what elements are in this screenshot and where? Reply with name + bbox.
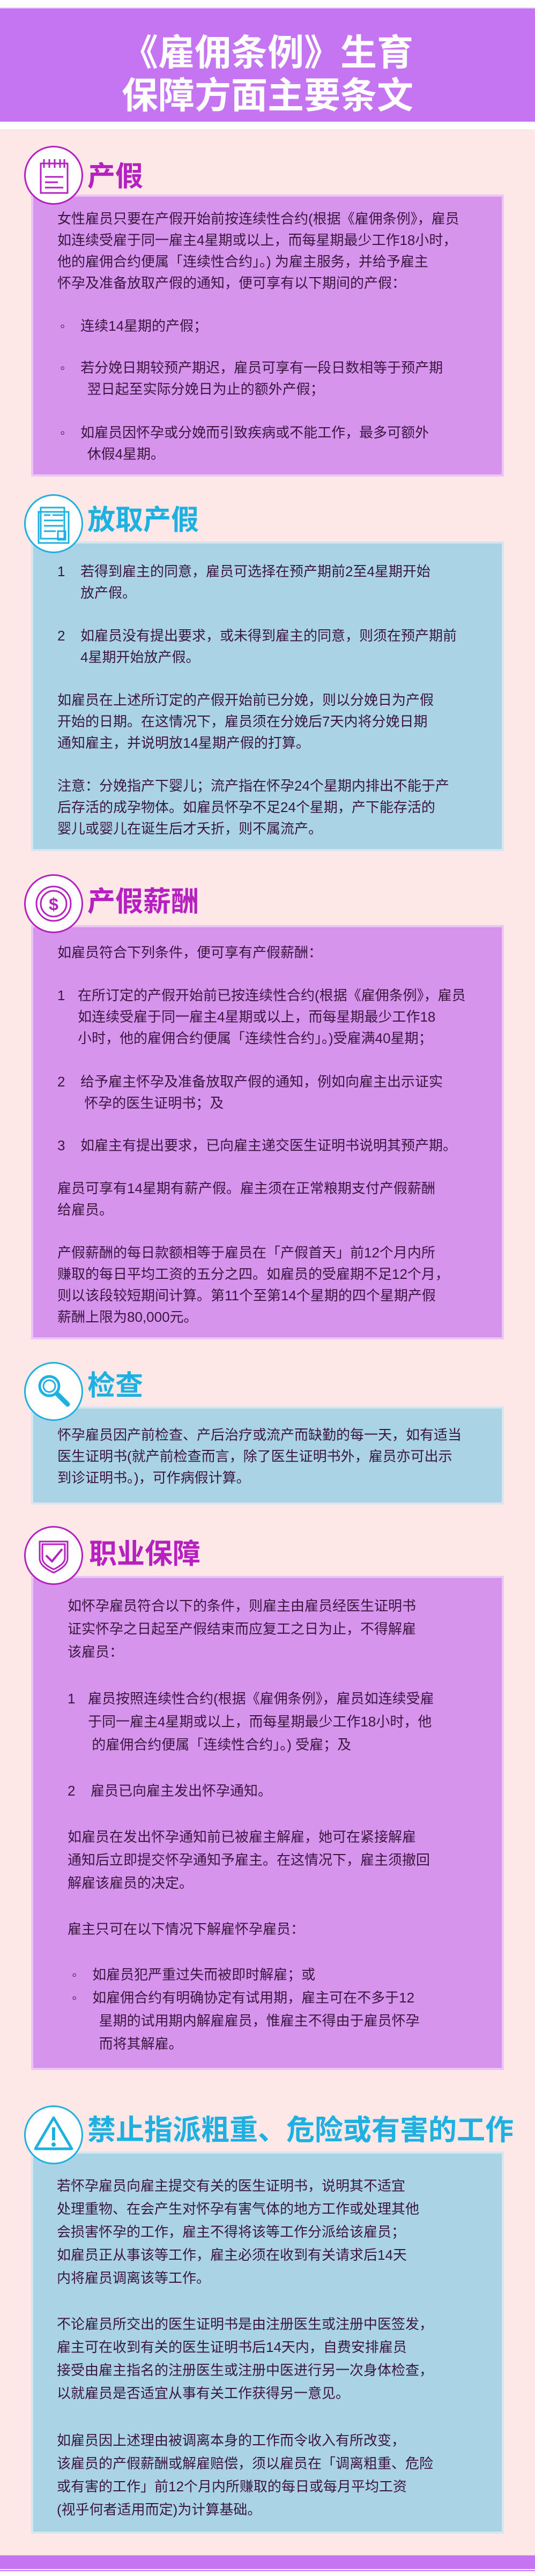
text: 3 <box>57 1137 65 1153</box>
text: 2 <box>57 628 65 644</box>
panel: hazardous work <box>31 2151 504 2534</box>
text: maternity leave intro: 女性雇员只要在产假开始前按连续性合约(根据《雇佣条例》，雇员 <box>57 211 459 227</box>
text: checkups <box>57 1427 462 1486</box>
text: 雇员已向雇主发出怀孕通知。 <box>91 1783 272 1799</box>
text: 以就雇员是否适宜从事有关工作获得另一意见。 <box>57 2385 350 2401</box>
bullet list: 翌日起至实际分娩日为止的额外产假； <box>87 381 324 397</box>
note: 注意：分娩指产下婴儿；流产指在怀孕24个星期内排出不能于产 <box>57 778 449 794</box>
text: 2 <box>68 1783 75 1799</box>
icon: dollar coin: $ <box>49 895 58 914</box>
text: 2 <box>57 1074 65 1090</box>
text: hazardous work: 若怀孕雇员向雇主提交有关的医生证明书，说明其不适宜 <box>57 2178 405 2194</box>
icon: shield check <box>24 1526 83 1585</box>
text: checkups: 医生证明书(就产前检查而言，除了医生证明书外，雇员亦可出示 <box>57 1448 452 1464</box>
text: maternity leave intro: 如连续受雇于同一雇主4星期或以上，而每星期最少工作18小时， <box>57 232 457 248</box>
heading: 禁止指派粗重、危险或有害的工作: 禁止指派粗重、危险或有害的工作 <box>87 2115 514 2146</box>
panel: taking leave <box>31 541 504 851</box>
text: hazardous work: 如雇员正从事该等工作，雇主必须在收到有关请求后14天 <box>57 2247 407 2263</box>
text: hazardous work: 内将雇员调离该等工作。 <box>57 2270 210 2286</box>
text: 雇主只可在以下情况下解雇怀孕雇员： <box>68 1921 304 1937</box>
text: employment protection: 证实怀孕之日起至产假结束而应复工之日为止，不得解雇 <box>68 1621 416 1637</box>
text: employment protection: 该雇员： <box>68 1644 123 1660</box>
title band <box>0 8 535 122</box>
bullet list: 休假4星期。 <box>87 446 165 462</box>
note <box>57 778 449 837</box>
heading: 产假薪酬: 产假薪酬 <box>87 887 199 918</box>
bullet list: ◦ 连续14星期的产假； <box>60 318 207 334</box>
bullet list <box>60 318 443 462</box>
heading: 放取产假: 放取产假 <box>87 505 199 536</box>
text: 在所订定的产假开始前已按连续性合约(根据《雇佣条例》，雇员 <box>78 987 466 1003</box>
footer band <box>0 2555 535 2569</box>
text: 4星期开始放产假。 <box>80 649 199 665</box>
text: checkups: 到诊证明书。)，可作病假计算。 <box>57 1470 250 1486</box>
text: hazardous work <box>57 2178 419 2286</box>
panel: maternity pay <box>31 925 504 1339</box>
title <box>122 33 413 116</box>
text: 如雇员没有提出要求，或未得到雇主的同意，则须在预产期前 <box>80 628 457 644</box>
text: 解雇该雇员的决定。 <box>68 1875 193 1891</box>
text: hazardous work: 处理重物、在会产生对怀孕有害气体的地方工作或处理其他 <box>57 2201 419 2217</box>
text: 该雇员的产假薪酬或解雇赔偿，须以雇员在「调离粗重、危险 <box>57 2455 433 2471</box>
text: maternity pay: 如雇员符合下列条件，便可享有产假薪酬： <box>57 944 322 961</box>
text: checkups: 怀孕雇员因产前检查、产后治疗或流产而缺勤的每一天，如有适当 <box>57 1427 462 1443</box>
title: 保障方面主要条文 <box>122 76 413 116</box>
text: taking leave items: 1 <box>57 563 65 579</box>
text: 雇员可享有14星期有薪产假。雇主须在正常粮期支付产假薪酬 <box>57 1180 435 1196</box>
text: 如雇员在上述所订定的产假开始前已分娩，则以分娩日为产假 <box>57 692 434 708</box>
text: taking leave items <box>57 563 430 601</box>
panel: employment protection <box>31 1576 504 2070</box>
text: maternity leave intro <box>57 211 459 291</box>
text: 雇员按照连续性合约(根据《雇佣条例》，雇员如连续受雇 <box>88 1691 434 1707</box>
panel: checkups <box>31 1406 504 1505</box>
text: 于同一雇主4星期或以上，而每星期最少工作18小时，他 <box>88 1714 432 1730</box>
note: 婴儿或婴儿在诞生后才夭折，则不属流产。 <box>57 821 322 837</box>
text: 给雇员。 <box>57 1202 113 1218</box>
text: 通知后立即提交怀孕通知予雇主。在这情况下，雇主须撤回 <box>68 1852 430 1868</box>
text: 如雇员因上述理由被调离本身的工作而令收入有所改变， <box>57 2432 405 2448</box>
title: 《雇佣条例》生育 <box>122 33 413 73</box>
text: 星期的试用期内解雇雇员，惟雇主不得由于雇员怀孕 <box>99 2013 420 2029</box>
text: 赚取的每日平均工资的五分之四。如雇员的受雇期不足12个月， <box>57 1266 449 1282</box>
text: 1 <box>57 987 65 1003</box>
note: 后存活的成孕物体。如雇员怀孕不足24个星期，产下能存活的 <box>57 799 435 815</box>
text: taking leave items: 若得到雇主的同意，雇员可选择在预产期前2至4星期开始 <box>80 563 430 579</box>
icon: magnifier <box>24 1362 83 1421</box>
text: ◦ 如雇佣合约有明确协定有试用期，雇主可在不多于12 <box>72 1990 414 2006</box>
text: 产假薪酬的每日款额相等于雇员在「产假首天」前12个月内所 <box>57 1245 435 1261</box>
text: ◦ 如雇员犯严重过失而被即时解雇；或 <box>72 1967 315 1983</box>
text: (视乎何者适用而定)为计算基础。 <box>57 2501 261 2518</box>
text: 不论雇员所交出的医生证明书是由注册医生或注册中医签发， <box>57 2316 433 2332</box>
text: employment protection <box>68 1598 416 1660</box>
text: 如连续受雇于同一雇主4星期或以上，而每星期最少工作18 <box>78 1009 435 1025</box>
text: maternity leave intro: 怀孕及准备放取产假的通知，便可享有以下期间的产假： <box>57 275 406 291</box>
text: employment protection: 如怀孕雇员符合以下的条件，则雇主由雇员经医生证明书 <box>68 1598 416 1614</box>
text: hazardous work: 会损害怀孕的工作，雇主不得将该等工作分派给该雇员； <box>57 2224 405 2240</box>
text: 则以该段较短期间计算。第11个至第14个星期的四个星期产假 <box>57 1287 436 1304</box>
icon: notepad <box>24 146 83 205</box>
text: 薪酬上限为80,000元。 <box>57 1309 198 1325</box>
text: 或有害的工作」前12个月内所赚取的每日或每月平均工资 <box>57 2478 407 2495</box>
text: 如雇主有提出要求，已向雇主递交医生证明书说明其预产期。 <box>80 1137 457 1153</box>
text: 怀孕的医生证明书；及 <box>84 1095 224 1111</box>
icon: document <box>24 494 83 553</box>
text: 小时，他的雇佣合约便属「连续性合约」。)受雇满40星期； <box>78 1030 433 1046</box>
panel: maternity leave <box>31 195 504 477</box>
bullet list: ◦ 若分娩日期较预产期迟，雇员可享有一段日数相等于预产期 <box>60 360 443 376</box>
text: 通知雇主，并说明放14星期产假的打算。 <box>57 735 310 751</box>
heading: 产假: 产假 <box>87 161 143 192</box>
bullet list: ◦ 如雇员因怀孕或分娩而引致疾病或不能工作，最多可额外 <box>60 425 429 441</box>
text: 的雇佣合约便属「连续性合约」。) 受雇；及 <box>92 1737 351 1753</box>
text: 接受由雇主指名的注册医生或注册中医进行另一次身体检查， <box>57 2362 433 2378</box>
heading: 检查: 检查 <box>87 1371 143 1402</box>
text: 而将其解雇。 <box>99 2036 183 2052</box>
icon: dollar coin <box>24 874 83 933</box>
heading: 职业保障: 职业保障 <box>89 1539 200 1570</box>
text: 给予雇主怀孕及准备放取产假的通知，例如向雇主出示证实 <box>80 1074 443 1090</box>
icon: warning <box>24 2105 83 2164</box>
text: 雇主可在收到有关的医生证明书后14天内，自费安排雇员 <box>57 2339 407 2355</box>
text: 如雇员在发出怀孕通知前已被雇主解雇，她可在紧接解雇 <box>68 1829 416 1845</box>
text: taking leave items: 放产假。 <box>80 585 136 601</box>
text: 开始的日期。在这情况下，雇员须在分娩后7天内将分娩日期 <box>57 713 427 729</box>
text: maternity leave intro: 他的雇佣合约便属「连续性合约」。) 为雇主服务，并给予雇主 <box>57 254 428 270</box>
text: 1 <box>68 1691 75 1707</box>
